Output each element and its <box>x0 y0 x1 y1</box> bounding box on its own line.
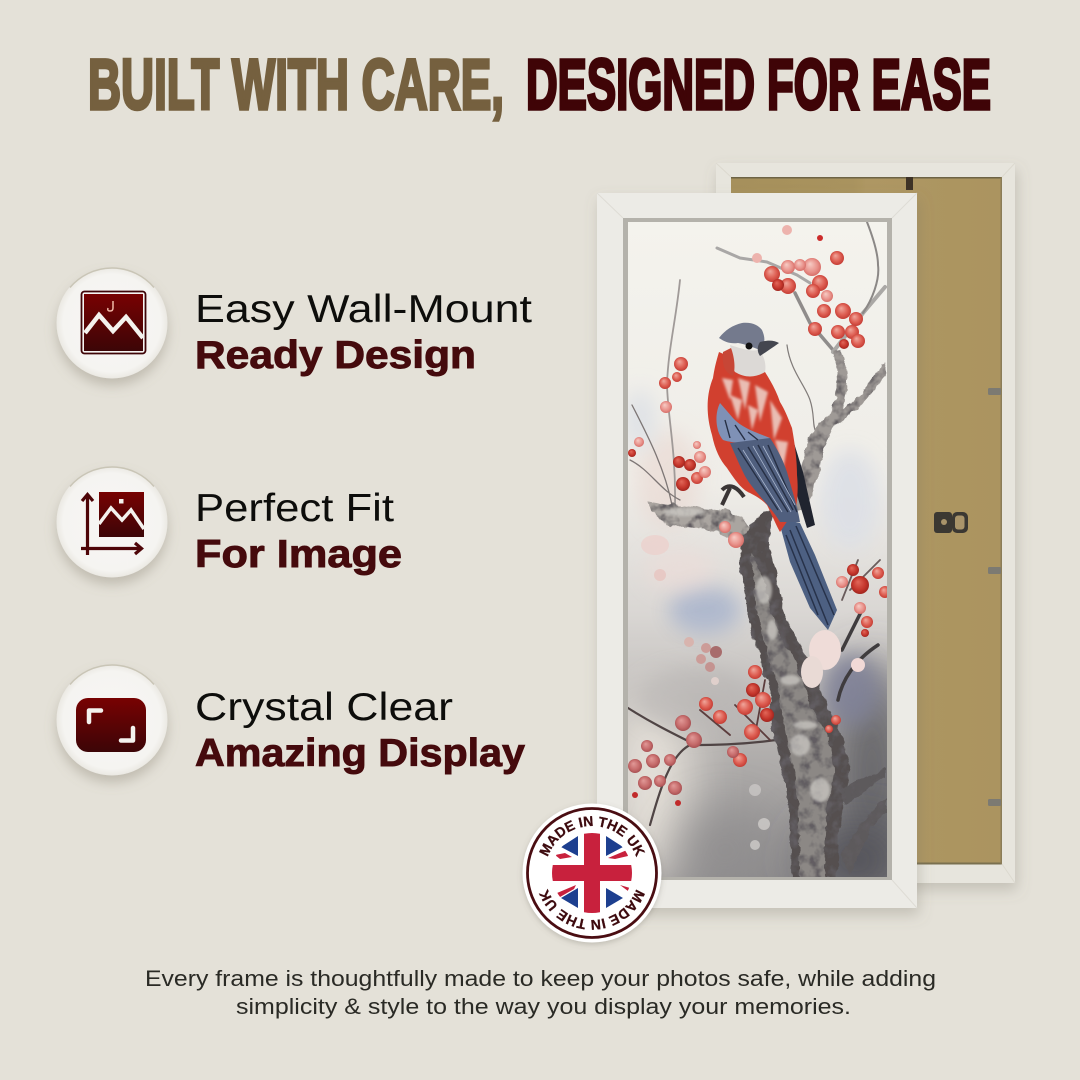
badge: made in the uk <box>520 804 664 946</box>
cheek <box>730 345 765 376</box>
text: easy wall-mount ready design: Ready Design <box>195 334 476 377</box>
berries upper cluster <box>752 225 865 349</box>
main trunk <box>740 508 850 878</box>
neck red <box>723 348 734 376</box>
upper wing <box>716 403 770 443</box>
white frame <box>597 193 917 908</box>
faded berries and blossoms <box>641 535 865 850</box>
head <box>719 323 764 350</box>
text: crystal clear amazing display: Amazing Display <box>195 732 525 775</box>
text: perfect fit for image: For Image <box>195 533 402 576</box>
lower wing <box>730 438 800 522</box>
watercolour backdrop <box>628 222 887 877</box>
beak <box>758 341 779 356</box>
feature: perfect fit <box>56 466 402 578</box>
bark highlights <box>664 508 830 802</box>
tree trunk and branches <box>648 350 887 878</box>
bark highlight <box>752 552 834 878</box>
lower right boughs <box>841 767 887 846</box>
footer line 2: simplicity & style to the way you display your memories. <box>236 994 851 1019</box>
feature: crystal clear <box>56 664 525 776</box>
icon: screen with corner marks <box>56 664 168 776</box>
icon: wall-mount picture <box>56 268 168 378</box>
berries left clusters <box>628 357 744 548</box>
artwork: bird on blossom branch <box>628 222 887 877</box>
bird <box>708 323 837 630</box>
text: crystal clear amazing display <box>195 686 525 775</box>
title part: built with care: BUILT WITH CARE, <box>88 46 504 125</box>
icon: picture with dimension arrows <box>56 466 168 578</box>
title <box>88 46 991 125</box>
feature: easy wall-mount <box>56 268 532 378</box>
text: perfect fit for image: Perfect Fit <box>195 487 394 530</box>
front frame with artwork <box>597 193 917 908</box>
badge text top: MADE IN THE UK <box>539 816 646 858</box>
body <box>708 352 798 532</box>
footer text <box>145 966 936 1019</box>
text: easy wall-mount ready design <box>195 288 532 377</box>
text: easy wall-mount ready design: Easy Wall-Mount <box>195 288 532 331</box>
eye <box>746 342 752 350</box>
tail <box>778 518 837 630</box>
text: crystal clear amazing display: Crystal Clear <box>195 686 453 729</box>
berries lower clusters <box>628 665 774 806</box>
icon: hanger clip <box>934 512 968 533</box>
berries right clusters <box>825 564 891 733</box>
left branch <box>648 502 750 538</box>
back of frame <box>716 163 1015 883</box>
badge text bottom: MADE IN THE UK <box>538 888 645 930</box>
union flag <box>552 833 632 913</box>
footer line 1: Every frame is thoughtfully made to keep your photos safe, while adding <box>145 966 936 991</box>
text: perfect fit for image <box>195 487 402 576</box>
mottled chest <box>722 378 788 470</box>
feet <box>722 486 744 505</box>
thin twigs <box>628 222 885 825</box>
dark primaries <box>794 444 815 528</box>
upper branch <box>790 350 887 510</box>
